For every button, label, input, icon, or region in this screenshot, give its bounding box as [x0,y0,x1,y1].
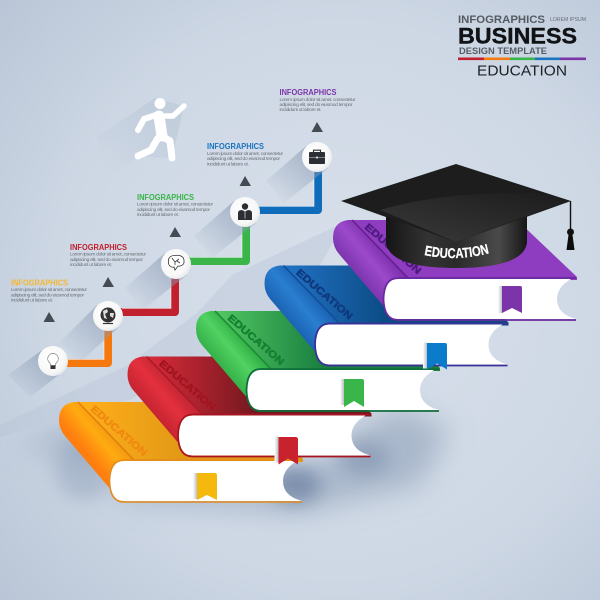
header: education: EDUCATION [477,62,567,80]
header block [458,14,586,80]
text block: step 3: Lorem ipsum dolor sit amet, consectetur [137,202,213,208]
book: red: EDUCATION [157,358,217,413]
long shadow of the book stack [0,222,345,437]
header: lorem ipsum: LOREM IPSUM [550,17,586,23]
text block: step 4: incididunt ut labore et. [207,161,249,167]
text block: step 5: adipiscing elit, sed do eiusmod tempor [280,102,353,108]
step 3: brain icon [161,249,191,279]
text block: step 4: INFOGRAPHICS [207,141,264,151]
text block: step 4: adipiscing elit, sed do eiusmod tempor [207,156,280,162]
text block: step 4: Lorem ipsum dolor sit amet, consectetur [207,151,283,157]
soft shadow under the books [15,405,450,512]
step 4: business person icon [230,197,260,227]
tassel [566,201,574,250]
text block: step 2: INFOGRAPHICS [70,242,127,252]
book: blue [264,266,508,370]
text block: step 2: Lorem ipsum dolor sit amet, consectetur [70,252,146,258]
text block: step 5: Lorem ipsum dolor sit amet, consectetur [280,97,356,103]
text block: step 3: incididunt ut labore et. [137,212,179,218]
cap board [341,164,571,242]
header: business: BUSINESS [458,24,577,48]
text block: step 1: incididunt ut labore et. [11,298,53,304]
text block: step 4 [207,141,283,167]
rainbow bar [458,58,586,60]
connector: blue [257,168,318,210]
graduation cap [341,164,574,268]
connector highlights [68,168,314,360]
step 5: briefcase icon [302,142,332,172]
text block: step 5: incididunt ut labore et. [280,107,322,113]
icon: running person [138,98,184,158]
book: orange: EDUCATION [88,404,149,459]
connector: red [120,276,175,312]
text block: step 3 [137,192,213,218]
circle long shadows [8,146,328,397]
step 1: bulb icon [38,346,68,376]
text block: step 2: adipiscing elit, sed do eiusmod tempor [70,257,143,263]
text block: step 1: Lorem ipsum dolor sit amet, consectetur [11,287,87,293]
book: purple [333,220,577,320]
text block: step 2 [70,242,146,268]
book: blue: EDUCATION [294,267,354,322]
marker triangles [44,122,323,322]
connector: orange [66,328,108,363]
text block: step 3: adipiscing elit, sed do eiusmod tempor [137,207,210,213]
text block: step 5 [280,87,356,113]
book: purple: EDUCATION [362,222,423,277]
cap band [386,216,527,268]
book: green: EDUCATION [225,313,286,368]
connector: green [188,224,246,261]
text block: step 1: INFOGRAPHICS [11,278,68,288]
text block: step 2: incididunt ut labore et. [70,262,112,268]
cap label: EDUCATION [424,244,489,258]
book: red [128,356,372,464]
step 2: globe icon [93,301,123,331]
book: orange [59,402,303,502]
text block: step 3: INFOGRAPHICS [137,192,194,202]
text block: step 1: adipiscing elit, sed do eiusmod tempor [11,292,84,298]
step connectors [66,168,318,363]
runner shadow [97,98,184,183]
header: infographics: INFOGRAPHICS [458,14,545,26]
header: design template: DESIGN TEMPLATE [459,46,547,56]
text block: step 1 [11,278,87,304]
text block: step 5: INFOGRAPHICS [280,87,337,97]
book: green [196,311,440,411]
